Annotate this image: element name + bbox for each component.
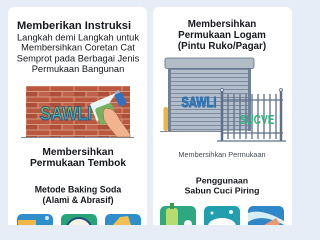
text block: subtitle: Membersihkan Coretan Cat — [21, 42, 135, 52]
text block: subtitle: Semprot pada Berbagai Jenis — [17, 54, 140, 64]
illustration: metal shutter and fence — [160, 58, 286, 141]
heading: Membersihkan Permukaan Logam: Permukaan Logam — [178, 30, 266, 41]
panel: left card — [8, 7, 147, 240]
metal fence — [217, 88, 286, 141]
roller shutter — [160, 58, 254, 132]
icon: scrubbing sponge — [105, 214, 141, 240]
heading: Membersihkan Permukaan Logam: (Pintu Ruko/Pagar) — [178, 41, 266, 52]
icon: wiping hand — [248, 206, 284, 236]
heading: Memberikan Instruksi: Memberikan Instruksi — [17, 20, 131, 32]
heading: Penggunaan Sabun Cuci Piring: Sabun Cuci Piring — [185, 186, 259, 196]
yellow post — [164, 107, 168, 131]
text block: subtitle: Langkah demi Langkah untuk — [17, 32, 139, 42]
graffiti green: SUCVE — [240, 112, 275, 127]
heading: Membersihkan Permukaan Tembok: Permukaan Tembok — [30, 158, 126, 169]
heading: Membersihkan Permukaan Tembok: Membersihkan — [42, 147, 114, 158]
icon: timer — [61, 214, 97, 240]
icon: spray can — [113, 89, 127, 107]
panel: right card — [153, 7, 292, 236]
graffiti tag: SAWLI — [40, 104, 92, 125]
caption: Membersihkan Permukaan — [178, 150, 266, 159]
icon: dish soap bottle — [160, 203, 196, 236]
icon: green sponge — [94, 102, 118, 126]
illustration: brick wall with graffiti — [21, 86, 134, 138]
heading: Membersihkan Permukaan Logam: Membersihkan — [188, 19, 256, 30]
graffiti blue: SAWLI — [182, 94, 216, 111]
heading: Penggunaan Sabun Cuci Piring: Penggunaan — [196, 176, 248, 186]
icon: baking soda box — [17, 214, 53, 240]
heading: Metode Baking Soda: (Alami & Abrasif) — [42, 195, 114, 205]
heading: Membersihkan Permukaan Logam — [178, 19, 266, 52]
text block: subtitle: Permukaan Bangunan — [32, 64, 124, 74]
text block: subtitle — [17, 32, 140, 74]
icon: hand — [103, 108, 130, 137]
heading: Penggunaan Sabun Cuci Piring — [185, 176, 259, 196]
spray mist — [90, 93, 116, 122]
heading: Membersihkan Permukaan Tembok — [30, 147, 126, 169]
heading: Metode Baking Soda: Metode Baking Soda — [35, 184, 121, 194]
heading: Metode Baking Soda — [35, 184, 121, 205]
icon: foam — [204, 206, 240, 236]
